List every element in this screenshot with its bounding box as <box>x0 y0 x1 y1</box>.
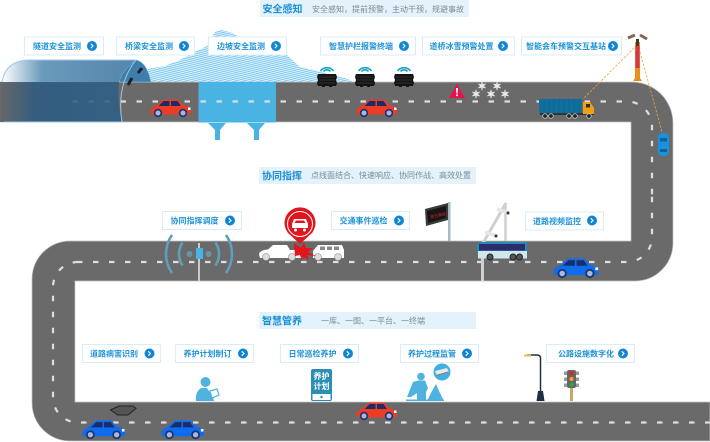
icon: accident location pin <box>284 207 316 244</box>
button: 日常巡检养护: 日常巡检养护 <box>288 348 336 358</box>
heading: 协同指挥 <box>259 167 476 184</box>
camera poles <box>482 203 510 281</box>
sign: roadside LED board: 前方事故 <box>430 210 446 219</box>
button: 智能会车预警交互基站 <box>522 37 622 55</box>
sign: roadside LED board <box>425 202 450 241</box>
truck <box>539 99 594 118</box>
icon: guardrail terminal 3 <box>394 68 414 87</box>
heading: 智慧管养 <box>259 312 476 329</box>
mountain slope <box>148 30 354 82</box>
icon: snowflakes <box>472 82 509 98</box>
heading: 协同指挥: 点线面结合、快速响应、协同作战、高效处置 <box>311 170 471 180</box>
button: 隧道安全监测: 隧道安全监测 <box>33 41 81 51</box>
pothole <box>110 406 136 415</box>
base station tower <box>583 35 662 132</box>
button: 养护过程监管 <box>400 344 478 362</box>
button: 养护计划制订 <box>176 344 254 362</box>
button: 养护过程监管: 养护过程监管 <box>408 348 456 358</box>
bus <box>477 242 527 260</box>
icon: maintenance plan tablet: 养护 <box>314 371 330 381</box>
button: 桥梁安全监测: 桥梁安全监测 <box>125 41 173 51</box>
button: 隧道安全监测 <box>24 37 104 55</box>
icon: guardrail terminal 2 <box>355 68 375 87</box>
button: 道桥冰雪预警处置 <box>422 37 514 55</box>
button: 道路视频监控 <box>526 212 604 230</box>
button: 养护计划制订: 养护计划制订 <box>184 348 232 358</box>
icon: guardrail terminal 1 <box>317 68 337 87</box>
button: 道路视频监控: 道路视频监控 <box>533 216 581 226</box>
accident: collided vehicles <box>259 242 344 261</box>
car: blue top view <box>658 133 669 156</box>
heading: 安全感知: 安全感知，提前预警，主动干预，规避事故 <box>312 4 464 14</box>
button: 边坡安全监测: 边坡安全监测 <box>217 41 265 51</box>
button: 智慧护栏报警终端 <box>320 37 416 55</box>
button: 道路病害识别: 道路病害识别 <box>90 348 138 358</box>
button: 公路设施数字化: 公路设施数字化 <box>558 348 614 358</box>
car: red bottom road <box>356 402 397 420</box>
button: 公路设施数字化 <box>546 344 634 362</box>
car: red top road 1 <box>150 100 191 117</box>
car: blue middle road <box>554 259 599 278</box>
bridge deck <box>198 82 276 122</box>
button: 道桥冰雪预警处置: 道桥冰雪预警处置 <box>430 41 494 51</box>
car: blue bottom road 2 <box>161 421 204 439</box>
tunnel <box>0 60 151 122</box>
button: 协同指挥调度 <box>162 212 242 230</box>
icon: maintenance plan tablet: 计划 <box>314 381 330 391</box>
button: 协同指挥调度: 协同指挥调度 <box>170 216 218 226</box>
button: 交通事件巡检 <box>332 212 410 230</box>
heading: 智慧管养: 智慧管养 <box>262 314 302 328</box>
heading: 安全感知 <box>260 0 469 17</box>
icon: planner person <box>196 377 219 401</box>
icon: road worker with camera <box>406 364 450 401</box>
heading: 安全感知: 安全感知 <box>262 2 302 16</box>
icon: maintenance plan tablet <box>311 369 332 401</box>
button: 桥梁安全监测 <box>116 37 194 55</box>
icon: signal antenna <box>166 235 232 281</box>
icon: traffic light <box>564 370 579 401</box>
icon: street lamp <box>524 354 544 401</box>
button: 日常巡检养护 <box>280 344 358 362</box>
button: 交通事件巡检: 交通事件巡检 <box>340 216 388 226</box>
road centre dashes <box>53 102 710 422</box>
heading: 智慧管养: 一库、一图、一平台、一终端 <box>321 316 425 326</box>
button: 智能会车预警交互基站: 智能会车预警交互基站 <box>526 41 606 51</box>
bridge piers <box>208 123 265 140</box>
icon: warning triangle <box>449 84 465 98</box>
car: red top road 2 <box>356 100 397 117</box>
heading: 协同指挥: 协同指挥 <box>262 170 302 182</box>
button: 边坡安全监测 <box>208 37 286 55</box>
car: blue bottom road 1 <box>82 421 125 439</box>
button: 道路病害识别 <box>82 344 160 362</box>
button: 智慧护栏报警终端: 智慧护栏报警终端 <box>329 41 393 51</box>
